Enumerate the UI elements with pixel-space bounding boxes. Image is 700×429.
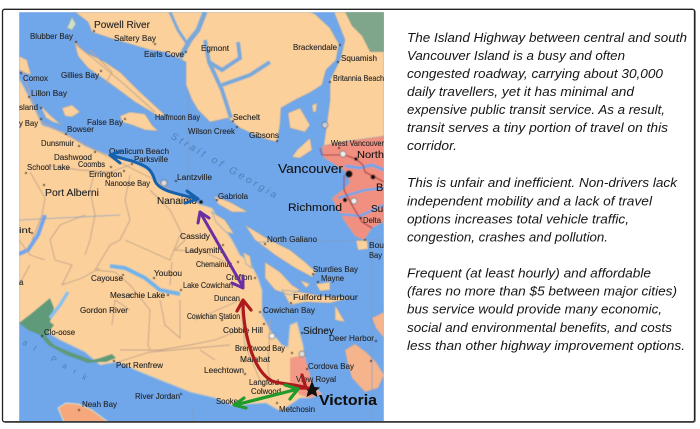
- paragraph: problem statement: congestion, crashes and pollution.: [407, 230, 608, 244]
- land east of Howe Sound: [323, 12, 384, 150]
- map place labels: Sturdies Bay: [313, 265, 358, 274]
- map place labels: Britannia Beach: [333, 74, 384, 83]
- map place labels: Lantzville: [177, 173, 213, 182]
- paragraph: problem statement: This is unfair and inefficient. Non-drivers lack: [407, 176, 678, 190]
- map place labels: Port Alberni: [45, 188, 99, 199]
- Olympic peninsula: [58, 403, 108, 422]
- paragraph: corridor overview: transit serves a tiny portion of travel on this: [407, 121, 668, 135]
- map place labels: Bay: [369, 251, 382, 260]
- map place labels: Cowichan Bay: [263, 306, 315, 315]
- arrow: Duncan to Victoria: [237, 300, 308, 388]
- paragraph: corridor overview: corridor.: [407, 139, 457, 153]
- icon: Victoria star: [306, 381, 320, 397]
- map place labels: Nanaimo: [157, 196, 197, 207]
- paragraph: problem statement: [407, 176, 678, 244]
- paragraph: proposed solution: bus service would provide many economic,: [407, 302, 662, 316]
- map place labels: Bowser: [67, 125, 94, 134]
- map place labels: Crofton: [226, 273, 252, 282]
- map place labels: Neah Bay: [82, 400, 117, 409]
- Garibaldi park: [345, 12, 384, 52]
- map place labels: Gibsons: [249, 131, 279, 140]
- Saanich urban area: [290, 355, 322, 398]
- Pacific Rim park: [19, 298, 116, 363]
- fjords: [205, 40, 270, 118]
- highway shields: [340, 151, 346, 157]
- map place labels: Chemainus: [196, 260, 232, 269]
- map place labels: Langford: [249, 378, 279, 387]
- map place labels: al Park: [21, 338, 96, 386]
- map place labels: Mesachie Lake: [110, 291, 166, 300]
- map place labels: Metchosin: [279, 405, 315, 414]
- map place labels: Clo-oose: [44, 328, 76, 337]
- map place labels: Gillies Bay: [61, 71, 99, 80]
- map place labels: Sooke: [216, 397, 239, 406]
- arrow: Sooke to Victoria: [234, 385, 298, 408]
- map of south Vancouver Island: [19, 12, 384, 422]
- map place labels: Lillon Bay: [31, 89, 67, 98]
- map place labels: Cordova Bay: [308, 362, 354, 371]
- Boundary Bay land: [356, 240, 368, 250]
- map place labels: Coombs: [78, 160, 105, 169]
- paragraph: corridor overview: expensive public transit service. As a result,: [407, 103, 665, 117]
- map place labels: North: [357, 149, 384, 161]
- map place labels: Youbou: [154, 269, 182, 278]
- town dots: [20, 30, 377, 411]
- map place labels: Sidney: [303, 325, 335, 337]
- paragraph: proposed solution: social and environmental benefits, and costs: [407, 321, 672, 335]
- Alberni Inlet: [19, 215, 45, 254]
- paragraph: proposed solution: (fares no more than $5 between major cities): [407, 284, 677, 298]
- paragraph: corridor overview: congested roadway, carrying about 30,000: [407, 67, 663, 81]
- map place labels: int: [19, 226, 32, 235]
- map place labels: Leechtown: [204, 366, 244, 375]
- map place labels: Mayne: [321, 274, 345, 283]
- map place labels: Vancouver: [278, 161, 344, 176]
- map place labels: Earls Cove: [144, 50, 185, 59]
- paragraph: proposed solution: [407, 266, 685, 353]
- Lasqueti island: [120, 112, 158, 131]
- Texada island: [74, 41, 165, 116]
- map place labels: Blubber Bay: [30, 32, 73, 41]
- map place labels: Gordon River: [80, 306, 128, 315]
- paragraph: proposed solution: Frequent (at least hourly) and affordable: [407, 266, 651, 280]
- map place labels: Malahat: [240, 355, 271, 364]
- map grid lines: [19, 90, 384, 422]
- map place labels: Saltery Bay: [114, 34, 156, 43]
- map place labels: Errington: [89, 170, 122, 179]
- map place labels: Duncan: [214, 294, 240, 303]
- paragraph: problem statement: options increases total vehicle traffic,: [407, 212, 629, 226]
- highway lines Metro Vancouver: [320, 148, 384, 228]
- map place labels: Qualicum Beach: [109, 147, 169, 156]
- map place labels: Cassidy: [180, 232, 210, 241]
- map place labels: Cayouse: [91, 274, 124, 283]
- Burrard Inlet and Fraser River: [345, 165, 384, 170]
- Gulf islands: [212, 212, 350, 322]
- map place labels: a: [19, 278, 24, 287]
- map place labels: Bou: [369, 241, 384, 250]
- map place labels: Victoria: [319, 393, 378, 409]
- Cowichan Lake: [110, 266, 180, 294]
- roads and boundaries: [19, 44, 272, 385]
- map place labels: False Bay: [87, 118, 123, 127]
- map place labels: Brentwood Bay: [235, 344, 285, 353]
- city dots: [345, 170, 353, 178]
- Denman and Hornby islands: [40, 105, 80, 125]
- map place labels: Wilson Creek: [188, 127, 236, 136]
- map place labels: Port Renfrew: [116, 361, 163, 370]
- map place labels: [19, 20, 384, 414]
- map place labels: sland: [19, 103, 38, 112]
- map place labels: Cowichan Station: [187, 312, 240, 321]
- islands of Howe Sound: [288, 103, 317, 158]
- map place labels: Dashwood: [54, 153, 92, 162]
- map place labels: Parksville: [134, 155, 169, 164]
- map place labels: Strait of Georgia: [168, 131, 281, 203]
- description text: [407, 31, 687, 353]
- map place labels: Nanoose Bay: [105, 179, 150, 188]
- arrow: Nanaimo to Duncan: [198, 212, 243, 288]
- map place labels: y Bay: [19, 119, 38, 128]
- map place labels: View Royal: [296, 375, 336, 384]
- map place labels: Brackendale: [293, 43, 338, 52]
- map place labels: Comox: [23, 74, 48, 83]
- map place labels: Fulford Harbour: [293, 293, 358, 302]
- Vancouver Island: [19, 78, 322, 411]
- map place labels: Egmont: [201, 44, 230, 53]
- paragraph: corridor overview: [407, 31, 687, 153]
- map place labels: Richmond: [288, 202, 342, 214]
- water background: [19, 12, 384, 422]
- map place labels: Lake Cowichan: [183, 281, 233, 290]
- map place labels: Halfmoon Bay: [155, 113, 200, 122]
- paragraph: corridor overview: daily travellers, yet it has minimal and: [407, 85, 635, 99]
- map place labels: Colwood: [251, 387, 281, 396]
- map place labels: River Jordan: [135, 392, 180, 401]
- map place labels: B: [376, 182, 383, 194]
- small northern islands: [67, 17, 76, 30]
- San Juan islands: [345, 344, 384, 392]
- paragraph: corridor overview: The Island Highway between central and south: [407, 31, 687, 45]
- arrow: Nanaimo to Qualicum Beach: [110, 151, 198, 203]
- map place labels: West Vancouver: [331, 139, 384, 148]
- paragraph: corridor overview: Vancouver Island is a busy and often: [407, 49, 625, 63]
- northern mainland coast: [75, 12, 339, 142]
- map place labels: Dunsmuir: [41, 139, 74, 148]
- Gabriola island: [214, 196, 248, 212]
- Metro Vancouver urban area: [322, 136, 384, 240]
- map place labels: Su: [371, 204, 383, 215]
- map place labels: North Galiano: [267, 235, 318, 244]
- map place labels: Delta: [363, 216, 382, 225]
- map place labels: Cobble Hill: [223, 326, 263, 335]
- paragraph: proposed solution: less than other highway improvement options.: [407, 339, 685, 353]
- map place labels: School Lake: [27, 163, 71, 172]
- map place labels: Deer Harbor: [329, 334, 374, 343]
- map place labels: Gabriola: [218, 192, 249, 201]
- map place labels: Ladysmith: [185, 246, 222, 255]
- map place labels: Squamish: [341, 54, 377, 63]
- map place labels: Sechelt: [233, 113, 261, 122]
- paragraph: problem statement: independent mobility and a lack of travel: [407, 194, 653, 208]
- map place labels: Powell River: [94, 20, 151, 31]
